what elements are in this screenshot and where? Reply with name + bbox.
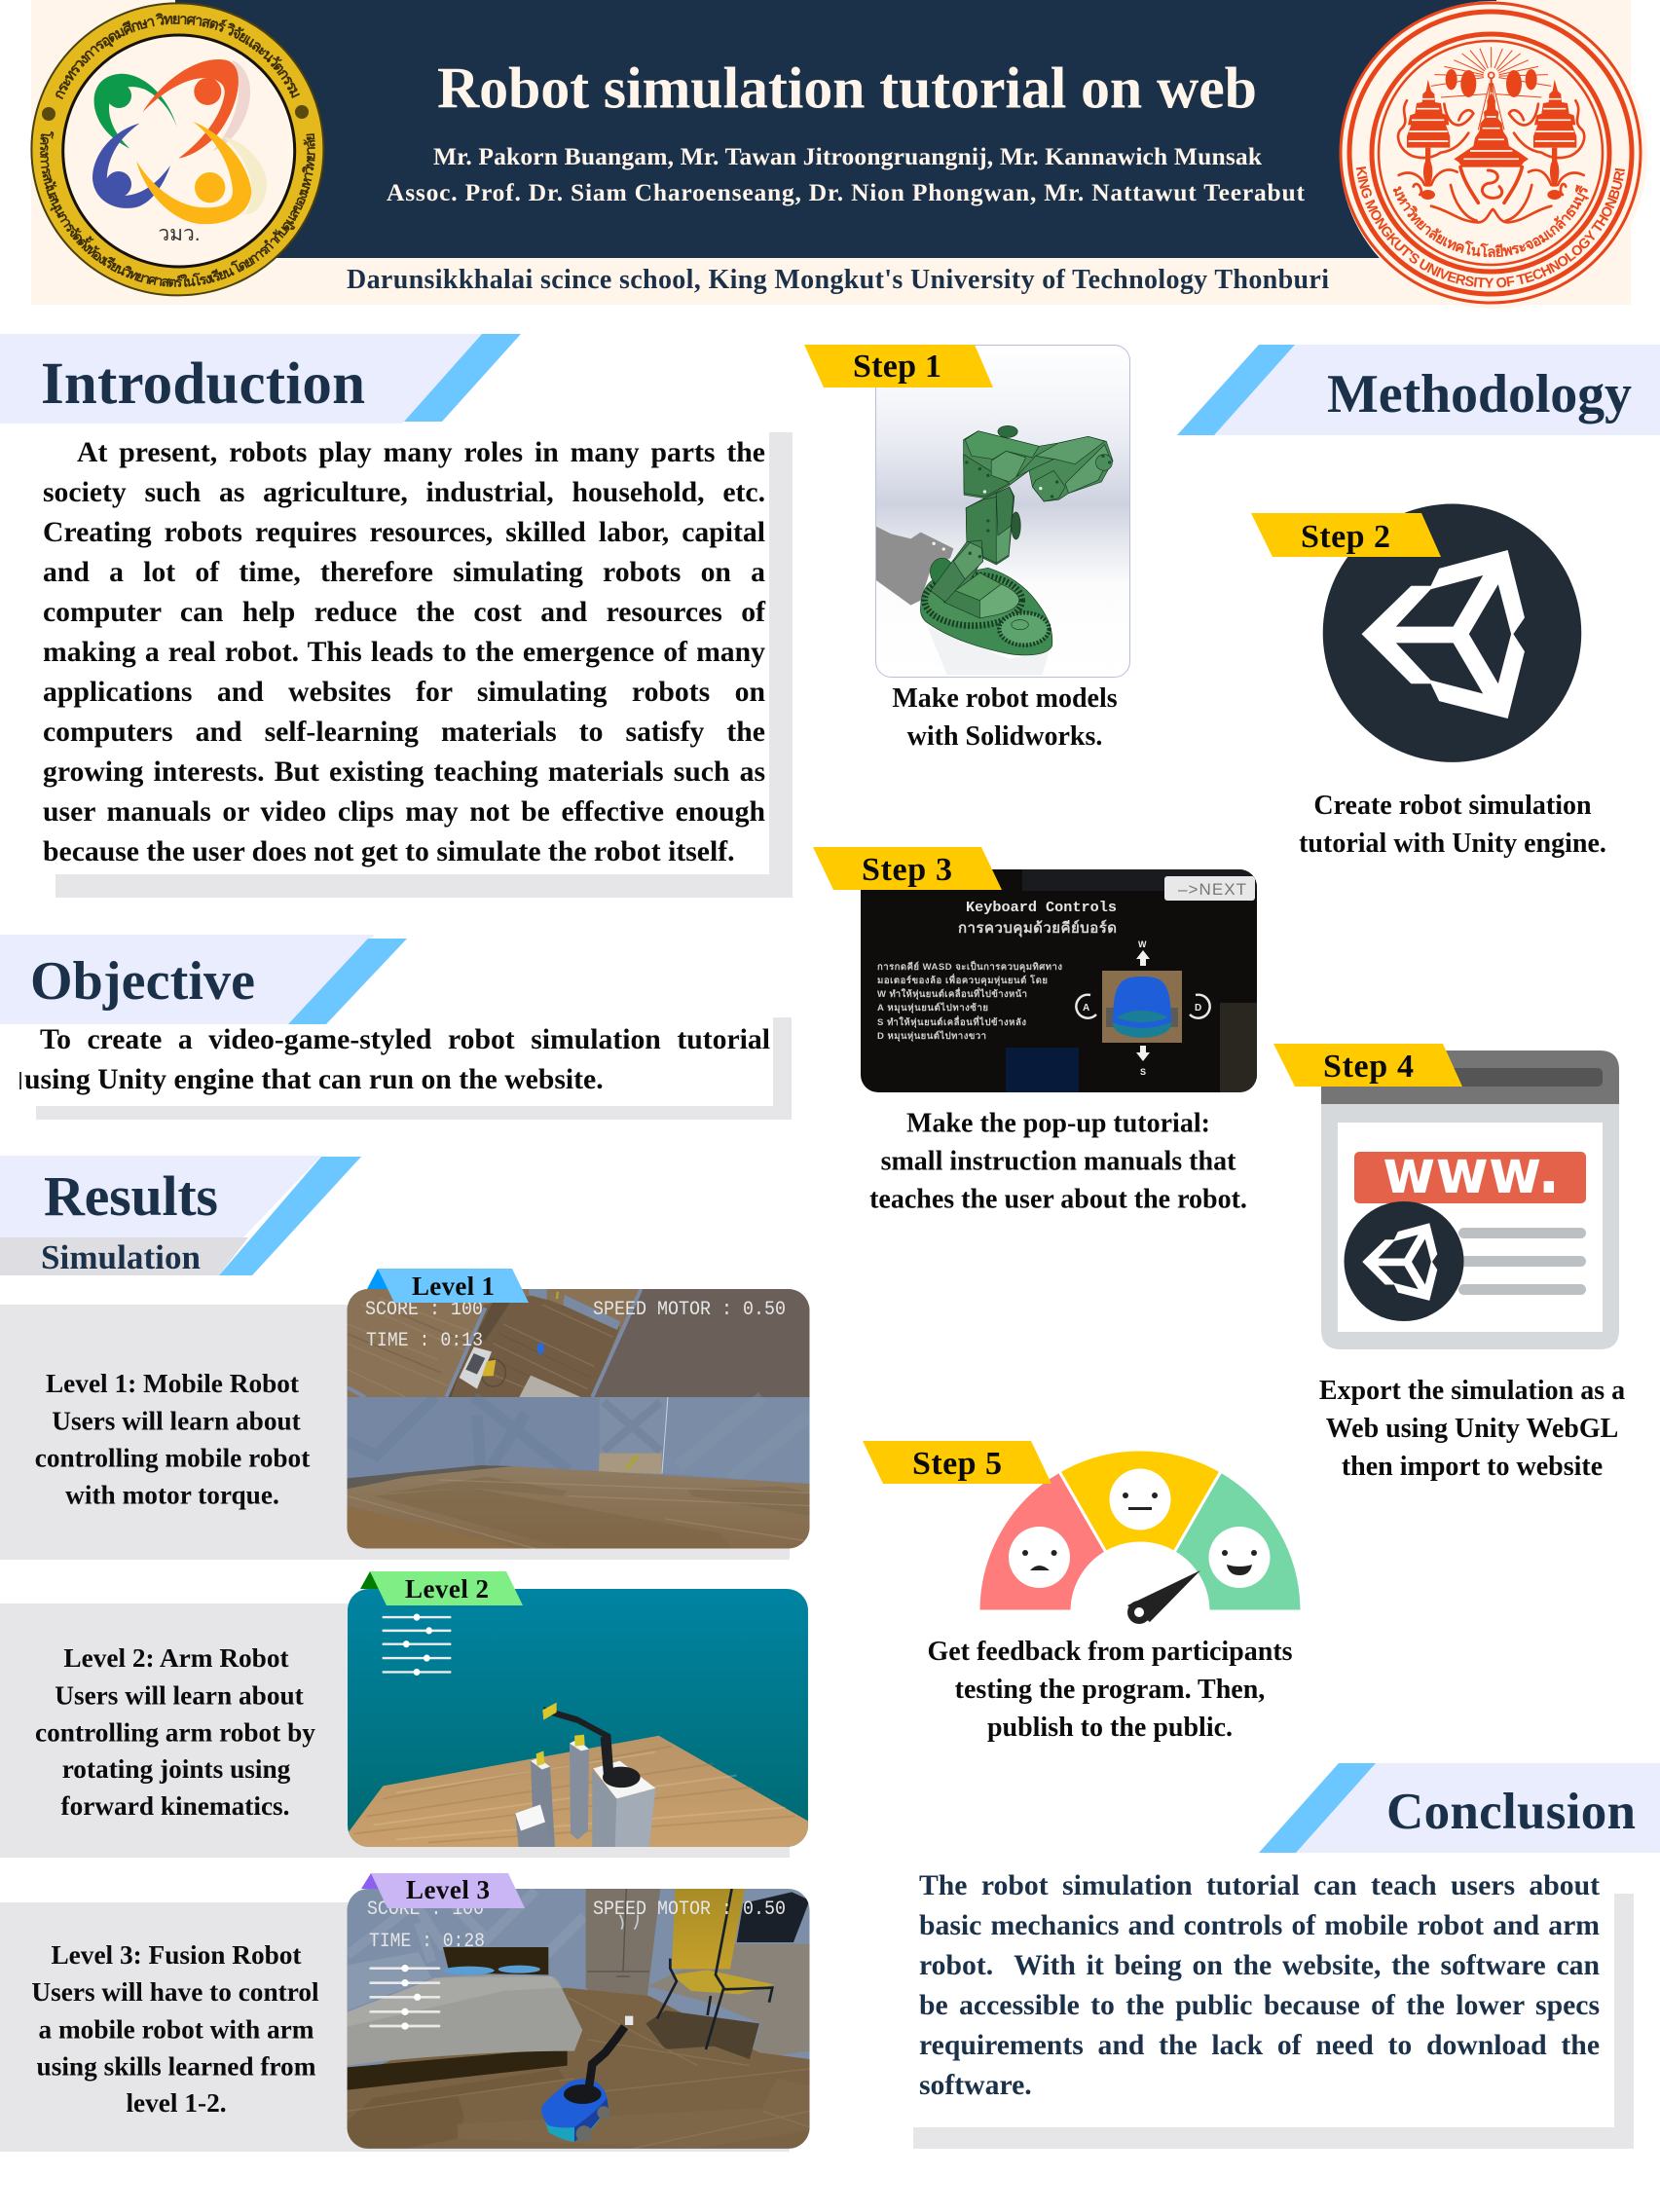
image: pop-up tutorial screenshot: S: [1140, 1067, 1146, 1077]
caption: step 5: publish to the public.: [987, 1713, 1233, 1743]
HUD: level 3 readouts: SPEED MOTOR : 0.50: [593, 1899, 786, 1921]
caption: step 5: Get feedback from participants: [927, 1637, 1293, 1667]
text: conclusion paragraph: robot. With it being on the website, the software can: [919, 1950, 1600, 1981]
heading: Introduction: [0, 334, 521, 424]
caption: step 2: Create robot simulation: [1313, 791, 1592, 821]
HUD: level 3 readouts: [368, 1900, 785, 1946]
heading: Introduction: Introduction: [41, 351, 365, 417]
text: conclusion paragraph: basic mechanics and controls of mobile robot and arm: [919, 1910, 1600, 1941]
subheading: Simulation: Simulation: [41, 1238, 201, 1276]
tag: Step 4: [1273, 1044, 1462, 1087]
silhouette: body and head backing: [931, 487, 1014, 602]
heading: Conclusion: [1259, 1763, 1660, 1853]
panel: level 1 description: Level 1: Mobile Robot: [46, 1369, 299, 1398]
logo: science classroom project: กระทรวงการอุดมศึกษา วิทยาศาสตร์ วิจัยและนวัตกรรม: [55, 14, 300, 99]
panel: level 1 description: [0, 1305, 790, 1560]
text: introduction paragraph: applications and websites for simulating robots on: [43, 677, 765, 708]
caption: step 4: then import to website: [1342, 1452, 1603, 1482]
panel: level 2 description: Level 2: Arm Robot: [63, 1643, 289, 1673]
image: pop-up tutorial screenshot: W ทำให้หุ่นยนต์เคลื่อนที่ไปข้างหน้า: [877, 986, 1027, 1000]
caption: step 4: Web using Unity WebGL: [1326, 1414, 1618, 1444]
screenshot: level 1 game: [341, 1285, 815, 1565]
tag: Step 4: Step 4: [1323, 1049, 1414, 1085]
tag: Level 2: [360, 1571, 523, 1605]
HUD: level 1 readouts: TIME : 0:13: [366, 1330, 483, 1352]
text: introduction paragraph: making a real robot. This leads to the emergence of many: [43, 637, 765, 668]
panel: level 1 description: with motor torque.: [65, 1480, 279, 1509]
logo: KMUTT seal: KING MONGKUT'S UNIVERSITY OF TECHNOLOGY THONBURI: [1355, 166, 1625, 288]
text: introduction paragraph: computers and self-learning materials to satisfy the: [43, 717, 765, 748]
panel: level 3 description: Users will have to control: [31, 1977, 319, 2007]
image: pop-up tutorial screenshot: การกดคีย์ WASD จะเป็นการควบคุมทิศทาง: [877, 960, 1062, 973]
caption: step 3: small instruction manuals that: [881, 1147, 1236, 1176]
panel: level 3 description: using skills learned from: [37, 2052, 316, 2082]
text: introduction paragraph: and a lot of time, therefore simulating robots on a: [43, 557, 765, 588]
image: pop-up tutorial screenshot: Keyboard Controls: [966, 900, 1117, 916]
text: introduction paragraph: society such as agriculture, industrial, household, etc.: [43, 477, 765, 508]
caption: step 2: tutorial with Unity engine.: [1299, 829, 1606, 859]
affiliation: Darunsikkhalai scince school, King Mongkut's University of Technology Thonburi: [347, 265, 1329, 295]
HUD: level 1 readouts: [366, 1301, 785, 1346]
tag: Step 5: [863, 1441, 1051, 1484]
screenshot: level 3 game: [341, 1884, 815, 2157]
panel shadow: conclusion: [913, 1894, 1634, 2149]
caption: step 1: [892, 683, 1118, 752]
authors: [387, 142, 1305, 206]
robot: [541, 2098, 609, 2142]
tag: Level 1: [367, 1269, 529, 1303]
header banner: [31, 0, 1631, 305]
caption: step 3: teaches the user about the robot.: [869, 1184, 1247, 1215]
HUD: level 3 readouts: SCORE : 100: [367, 1899, 484, 1921]
panel shadow: introduction: [55, 432, 793, 898]
column: [1012, 512, 1020, 539]
panel: level 1 description: controlling mobile robot: [35, 1443, 310, 1472]
image: pop-up tutorial screenshot: –>NEXT: [1178, 880, 1246, 899]
icon: web browser with Unity: [1321, 1051, 1619, 1349]
text: introduction paragraph: computer can help reduce the cost and resources of: [43, 597, 765, 628]
HUD: level 3 readouts: TIME : 0:28: [369, 1931, 485, 1953]
heading: Objective: Objective: [30, 951, 255, 1012]
panel: level 3 description: a mobile robot with arm: [38, 2015, 314, 2045]
tag: Step 3: Step 3: [862, 852, 952, 888]
image: pop-up tutorial screenshot: D หมุนหุ่นยนต์ไปทางขวา: [877, 1030, 986, 1042]
image: pop-up tutorial screenshot: A: [1083, 1003, 1089, 1014]
tag: Level 2: Level 2: [405, 1574, 489, 1604]
gauge needle: [1127, 1570, 1200, 1624]
tag: Step 2: Step 2: [1301, 519, 1390, 555]
panel: level 3 description: [0, 1902, 790, 2152]
icon: Unity logo: [1323, 504, 1581, 762]
caption: step 5: [927, 1637, 1293, 1743]
base: [920, 568, 1052, 655]
text: conclusion paragraph: [919, 1870, 1600, 2101]
turret: [943, 591, 979, 618]
HUD: level 1 readouts: SCORE : 100: [365, 1299, 483, 1321]
caption: step 2: [1299, 791, 1606, 859]
main title: Robot simulation tutorial on web: [437, 56, 1257, 121]
image: pop-up tutorial screenshot: การควบคุมด้วยคีย์บอร์ด: [958, 919, 1117, 938]
screenshot: level 2 game: [348, 1589, 808, 1847]
HUD: level 1 readouts: SPEED MOTOR : 0.50: [593, 1299, 786, 1321]
text: conclusion paragraph: software.: [919, 2070, 1032, 2101]
heading: Objective: [0, 935, 407, 1024]
icon: web browser with Unity: www.: [1383, 1136, 1560, 1207]
heading: Results: [0, 1156, 361, 1276]
tag: Step 3: [813, 847, 1002, 890]
caption: step 3: [869, 1108, 1247, 1215]
panel: level 2 description: forward kinematics.: [60, 1791, 290, 1821]
panel: level 2 description: [0, 1604, 790, 1858]
panel: level 3 description: Level 3: Fusion Robot: [51, 1940, 302, 1970]
image: pop-up tutorial screenshot: มอเตอร์ของล้อ เพื่อควบคุมหุ่นยนต์ โดย: [877, 973, 1048, 986]
panel: level 2 description: rotating joints using: [62, 1754, 291, 1784]
tag: Level 3: Level 3: [406, 1875, 490, 1904]
text: introduction paragraph: growing interests. But existing teaching materials such as: [43, 756, 765, 788]
image: pop-up tutorial screenshot: A หมุนหุ่นยนต์ไปทางซ้าย: [877, 1002, 988, 1014]
text: objective paragraph: To create a video-game-styled robot simulation tutorial: [40, 1024, 770, 1055]
panel: level 3 description: level 1-2.: [126, 2088, 227, 2118]
image: pop-up tutorial screenshot: D: [1195, 1003, 1201, 1014]
icon: feedback gauge: [978, 1450, 1302, 1624]
image: pop-up tutorial screenshot: W: [1138, 940, 1147, 949]
face: sad: [1009, 1527, 1070, 1588]
text: objective paragraph: using Unity engine that can run on the website.: [24, 1064, 604, 1095]
heading: Methodology: [1177, 345, 1660, 435]
text: introduction paragraph: user manuals or video clips may not be effective enough: [43, 796, 765, 828]
face: happy: [1209, 1527, 1270, 1588]
tag: Level 1: Level 1: [412, 1272, 495, 1301]
caption: step 4: [1319, 1376, 1625, 1482]
caption: step 4: Export the simulation as a: [1319, 1376, 1625, 1406]
text: conclusion paragraph: requirements and the lack of need to download the: [919, 2030, 1600, 2061]
panel: level 1 description: Users will learn about: [52, 1406, 301, 1435]
tag: Level 3: [361, 1873, 525, 1908]
tag: Step 5: Step 5: [912, 1446, 1002, 1482]
text: introduction paragraph: Creating robots requires resources, skilled labor, capital: [43, 517, 765, 548]
caption: step 1: with Solidworks.: [907, 721, 1102, 752]
logo: science classroom project: โครงการสนับสนุนการจัดตั้งห้องเรียนวิทยาศาสตร์ในโรงเรียน โดยการกำกับดูแลของมหาวิทยาลัย: [40, 130, 315, 287]
panel: level 2 description: controlling arm robot by: [35, 1717, 315, 1747]
lower link: [930, 558, 951, 584]
text: introduction paragraph: [43, 436, 765, 867]
heading: Methodology: Methodology: [1327, 364, 1632, 424]
panel: level 2 description: Users will learn about: [55, 1680, 304, 1710]
image: Solidworks robot model: [874, 345, 1130, 678]
logo: KMUTT seal: มหาวิทยาลัยเทคโนโลยีพระจอมเกล้าธนบุรี: [1392, 185, 1589, 257]
authors: Mr. Pakorn Buangam, Mr. Tawan Jitroongruangnij, Mr. Kannawich Munsak: [433, 142, 1263, 170]
text: introduction paragraph: because the user does not get to simulate the robot itself.: [43, 836, 734, 867]
text: conclusion paragraph: be accessible to the public because of the lower specs: [919, 1990, 1600, 2021]
logo: science classroom project: [30, 2, 325, 296]
text: objective paragraph: [24, 1024, 770, 1095]
tag: Step 1: [804, 345, 993, 387]
image: pop-up tutorial screenshot: S ทำให้หุ่นยนต์เคลื่อนที่ไปข้างหลัง: [877, 1014, 1026, 1028]
heading: Conclusion: Conclusion: [1386, 1784, 1636, 1840]
caption: step 1: Make robot models: [892, 683, 1118, 714]
panel shadow: objective: [19, 1017, 792, 1120]
caption: step 3: Make the pop-up tutorial:: [906, 1108, 1210, 1139]
tag: Step 1: Step 1: [853, 349, 941, 385]
face: neutral: [1110, 1468, 1170, 1530]
logo: KMUTT seal: [1340, 1, 1647, 309]
tag: Step 2: [1251, 513, 1441, 557]
image: pop-up tutorial screenshot: [861, 869, 1257, 1092]
authors: Assoc. Prof. Dr. Siam Charoenseang, Dr. Nion Phongwan, Mr. Nattawut Teerabut: [387, 178, 1305, 206]
text: conclusion paragraph: The robot simulation tutorial can teach users about: [919, 1870, 1600, 1901]
logo: science classroom project: วมว.: [158, 223, 201, 245]
text: introduction paragraph: At present, robots play many roles in many parts the: [77, 436, 765, 467]
caption: step 5: testing the program. Then,: [955, 1675, 1265, 1705]
head: [998, 425, 1017, 437]
heading: Results: Results: [44, 1164, 218, 1228]
